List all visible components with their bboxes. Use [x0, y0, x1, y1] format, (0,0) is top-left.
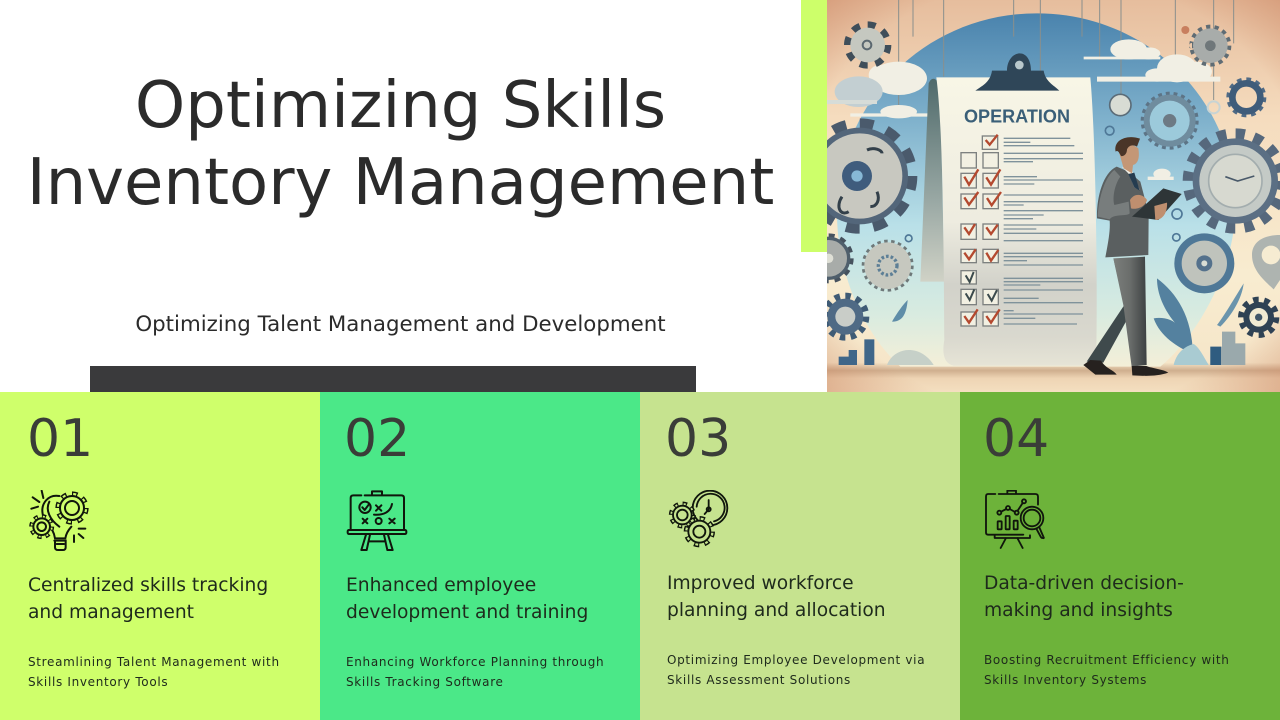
- heading on paper: OPERATION: [964, 107, 1070, 127]
- card 3 description: [667, 653, 925, 687]
- gear: top left: [848, 25, 888, 65]
- hair: [1115, 137, 1140, 156]
- businessman: [1083, 137, 1182, 376]
- card 3 number: 03: [665, 409, 731, 469]
- subtitle: Optimizing Talent Management and Development: [135, 312, 666, 337]
- large gear: left: [808, 124, 911, 228]
- gears: lower left: [807, 236, 912, 337]
- card 1 description: [28, 655, 280, 689]
- large gear: right with clock: [1189, 134, 1280, 228]
- icon: strategy board: [346, 490, 408, 551]
- small rings: [905, 126, 1182, 242]
- card 2 number: 02: [344, 409, 410, 469]
- card 3 heading: Improved workforce: [667, 573, 854, 594]
- card 4 description: Boosting Recruitment Efficiency with: [984, 653, 1230, 667]
- card 2 heading: [346, 575, 588, 623]
- jacket: [1097, 167, 1149, 257]
- leaves and skyline: [839, 278, 1245, 365]
- card 4 heading: Data-driven decision-: [984, 573, 1184, 594]
- icon: presentation chart with magnifier: [985, 490, 1045, 549]
- face: [1118, 145, 1139, 173]
- card 1 heading: and management: [28, 602, 194, 623]
- card 2 heading: Enhanced employee: [346, 575, 536, 596]
- clipboard clip: [975, 53, 1059, 91]
- clipboard and hands: [1132, 188, 1182, 220]
- card 1 heading: Centralized skills tracking: [28, 575, 268, 596]
- red check marks: [964, 135, 1001, 323]
- text lines: [1004, 138, 1083, 324]
- icon: lightbulb with gears: [29, 490, 89, 551]
- accent bar: dark: [90, 366, 696, 392]
- checklist boxes: [961, 136, 998, 326]
- paper roll back: [920, 79, 944, 282]
- card 1 description: Streamlining Talent Management with: [28, 655, 280, 669]
- card 4 heading: making and insights: [984, 600, 1173, 621]
- card 4 description: [984, 653, 1230, 687]
- accent strip: lime: [801, 0, 827, 252]
- paper sheet: [936, 77, 1097, 366]
- card 3 description: Skills Assessment Solutions: [667, 673, 851, 687]
- gear: top right: [1181, 26, 1229, 64]
- jacket sleeve highlight: [1098, 170, 1130, 219]
- front leg: [1113, 257, 1147, 367]
- card 2 description: Enhancing Workforce Planning through: [346, 655, 604, 669]
- collar and tie: [1122, 167, 1140, 190]
- card 4 description: Skills Inventory Systems: [984, 673, 1147, 687]
- card 2 description: Skills Tracking Software: [346, 675, 504, 689]
- back leg: [1087, 258, 1129, 363]
- sky circle: [837, 13, 1235, 367]
- card 4 number: 04: [983, 409, 1049, 469]
- clouds: [827, 39, 1220, 180]
- card 3 heading: planning and allocation: [667, 600, 886, 621]
- illustration: operation checklist with gears and businessman: [827, 0, 1280, 392]
- dark check marks: [966, 272, 997, 301]
- location pin: [1252, 235, 1280, 289]
- title: Inventory Management: [27, 146, 774, 220]
- title: Optimizing Skills: [135, 69, 666, 143]
- card 1 description: Skills Inventory Tools: [28, 675, 168, 689]
- card 3: [640, 392, 960, 720]
- ring gear: right: [1230, 81, 1263, 114]
- card 4 heading: [984, 573, 1184, 621]
- card 1 heading: [28, 575, 268, 623]
- background: [827, 0, 1280, 392]
- card 2: [320, 392, 640, 720]
- gear: lower right: [1174, 233, 1276, 335]
- card 2 description: [346, 655, 604, 689]
- card 1 number: 01: [27, 409, 93, 469]
- card 3 description: Optimizing Employee Development via: [667, 653, 925, 667]
- hanging strings: [899, 0, 1234, 113]
- gear: upper center right: [1110, 94, 1220, 147]
- card 4: [960, 392, 1280, 720]
- card 2 heading: development and training: [346, 602, 588, 623]
- icon: gears and clock: [668, 490, 728, 548]
- card 3 heading: [667, 573, 886, 621]
- shoes: [1083, 360, 1168, 376]
- title: [27, 69, 774, 220]
- card 1: [0, 392, 320, 720]
